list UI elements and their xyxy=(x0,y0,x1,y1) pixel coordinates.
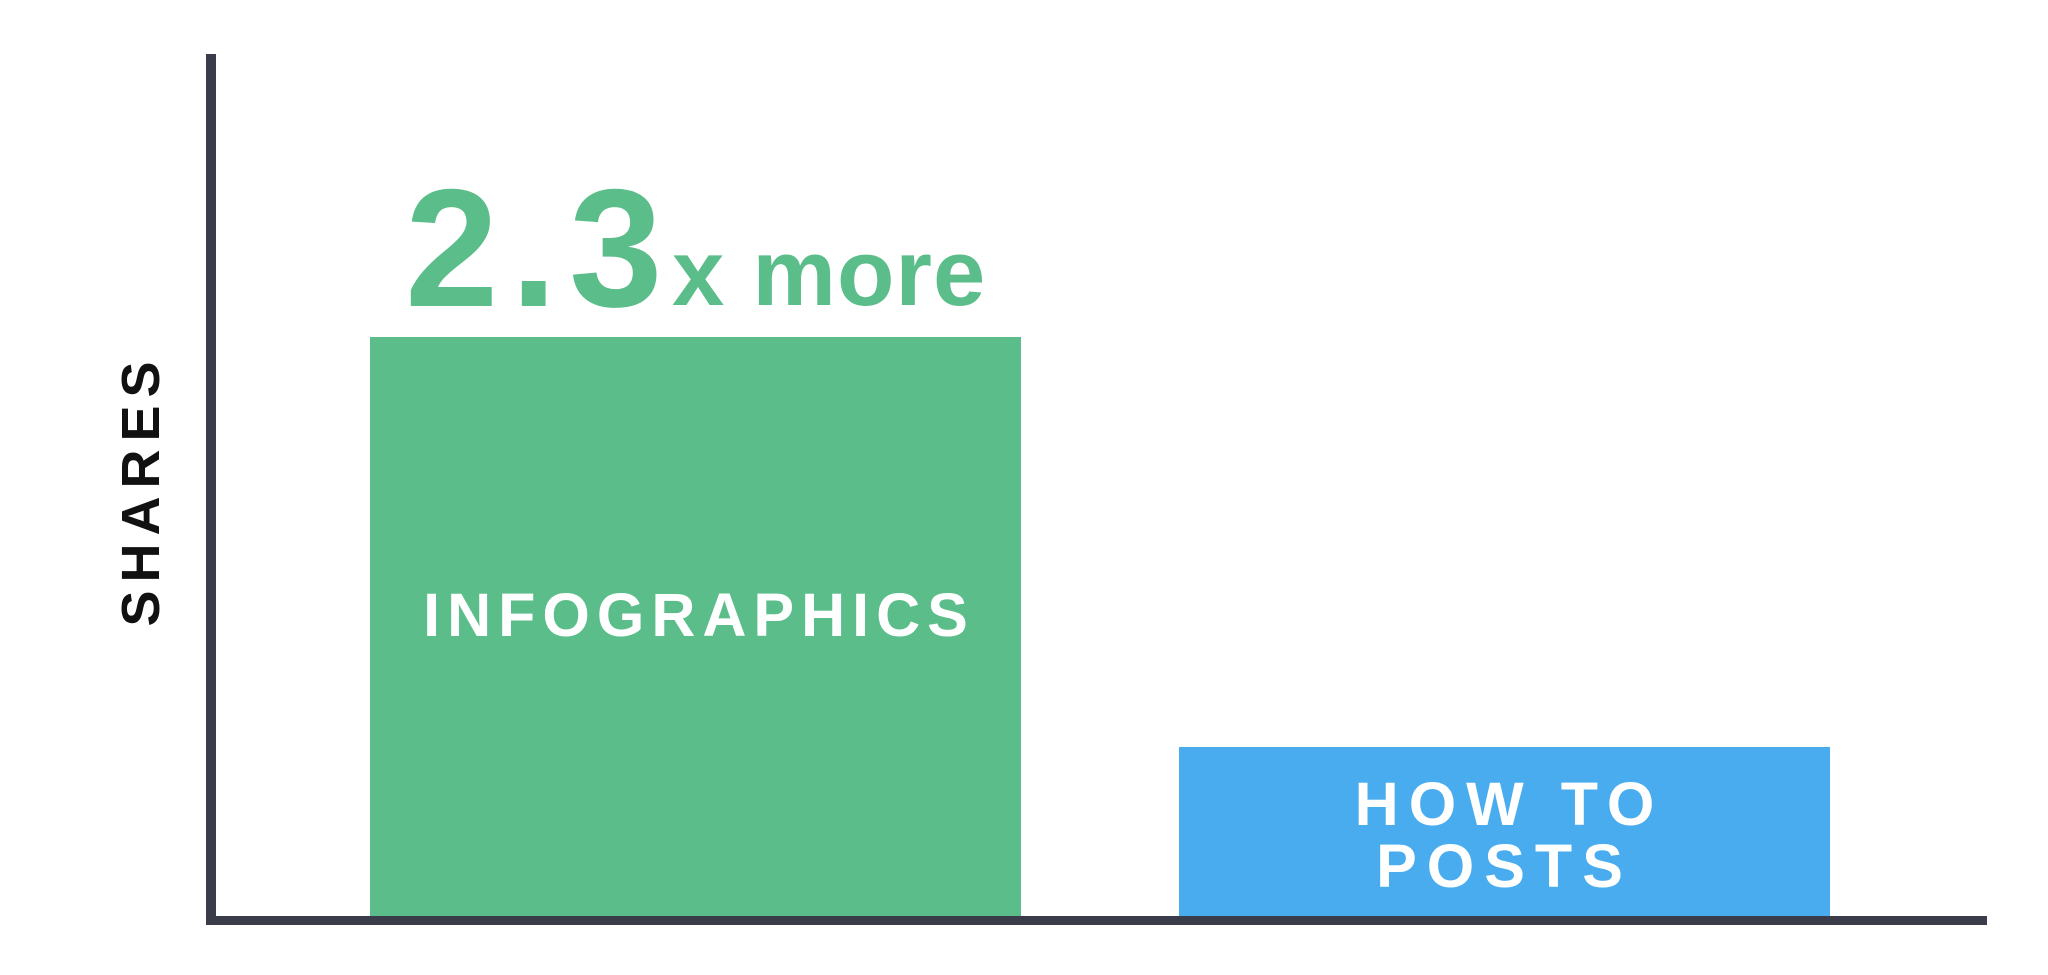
bar label: how to posts: POSTS xyxy=(1376,832,1633,900)
callout: 2.3x more: x more xyxy=(672,220,986,325)
bar: how to posts xyxy=(1179,747,1830,916)
bar: infographics xyxy=(370,337,1021,916)
bar label: infographics: INFOGRAPHICS xyxy=(423,581,975,649)
y axis xyxy=(206,54,216,925)
x axis xyxy=(206,916,1987,925)
callout: 2.3x more xyxy=(405,154,986,342)
callout: 2.3x more: 2.3 xyxy=(405,154,675,342)
bar label: how to posts xyxy=(1355,770,1664,900)
axis label: shares: SHARES xyxy=(111,353,171,627)
bar label: how to posts: HOW TO xyxy=(1355,770,1664,838)
